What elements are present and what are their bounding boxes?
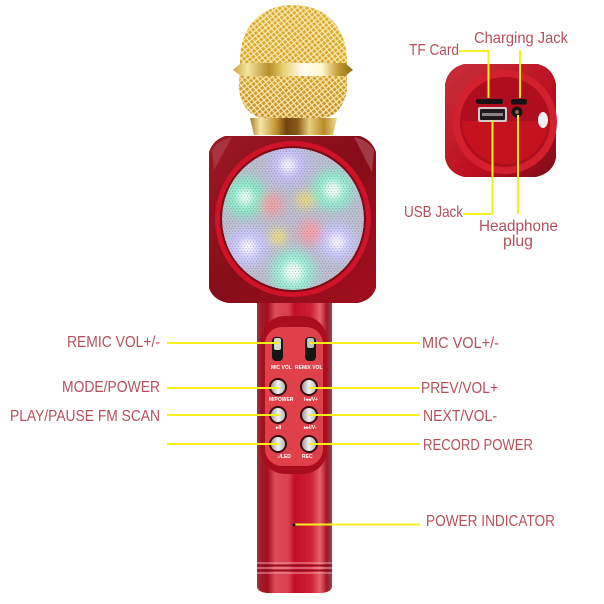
labels: Headphone (479, 218, 558, 235)
button labels: ▸II (275, 425, 282, 431)
notch (538, 112, 548, 128)
switch: remix vol (305, 337, 316, 361)
labels (10, 30, 569, 530)
micro USB port (511, 99, 527, 104)
speaker cube (209, 136, 376, 303)
switch: mic vol (272, 337, 283, 361)
buttons (270, 379, 317, 452)
microphone head (233, 5, 353, 118)
labels: plug (503, 233, 533, 250)
TF slot (476, 99, 503, 104)
inset round face (453, 70, 557, 174)
inset cube (445, 64, 556, 177)
labels: MODE/POWER (62, 379, 160, 396)
USB port (478, 107, 507, 122)
button labels: ▸▸I/V- (303, 425, 317, 431)
control panel (261, 316, 327, 474)
LED lights (224, 145, 356, 294)
power indicator dot (292, 524, 296, 526)
inset: jack end view (445, 64, 557, 177)
button labels: REMIX VOL (295, 365, 323, 371)
button labels: MIC VOL (271, 365, 292, 371)
button labels: I◂◂/V+ (304, 397, 318, 403)
callout lines (167, 50, 520, 524)
labels: POWER INDICATOR (426, 513, 555, 530)
labels: RECORD POWER (423, 437, 533, 454)
microphone neck (250, 118, 337, 135)
labels: PREV/VOL+ (421, 380, 498, 397)
microphone (209, 5, 376, 593)
labels: NEXT/VOL- (423, 408, 497, 425)
headphone jack (512, 106, 522, 118)
labels: MIC VOL+/- (422, 335, 499, 352)
button labels: ♪/LED (277, 454, 291, 460)
button labels: REC (302, 454, 313, 460)
labels: TF Card (409, 42, 459, 59)
LED grille (222, 145, 364, 294)
labels: PLAY/PAUSE FM SCAN (10, 408, 160, 425)
metal band (233, 63, 353, 76)
handle (257, 298, 332, 593)
button labels (269, 365, 323, 460)
labels: USB Jack (404, 204, 464, 221)
button labels: M/POWER (269, 397, 294, 403)
labels: REMIC VOL+/- (67, 334, 160, 351)
labels: Charging Jack (474, 30, 569, 47)
